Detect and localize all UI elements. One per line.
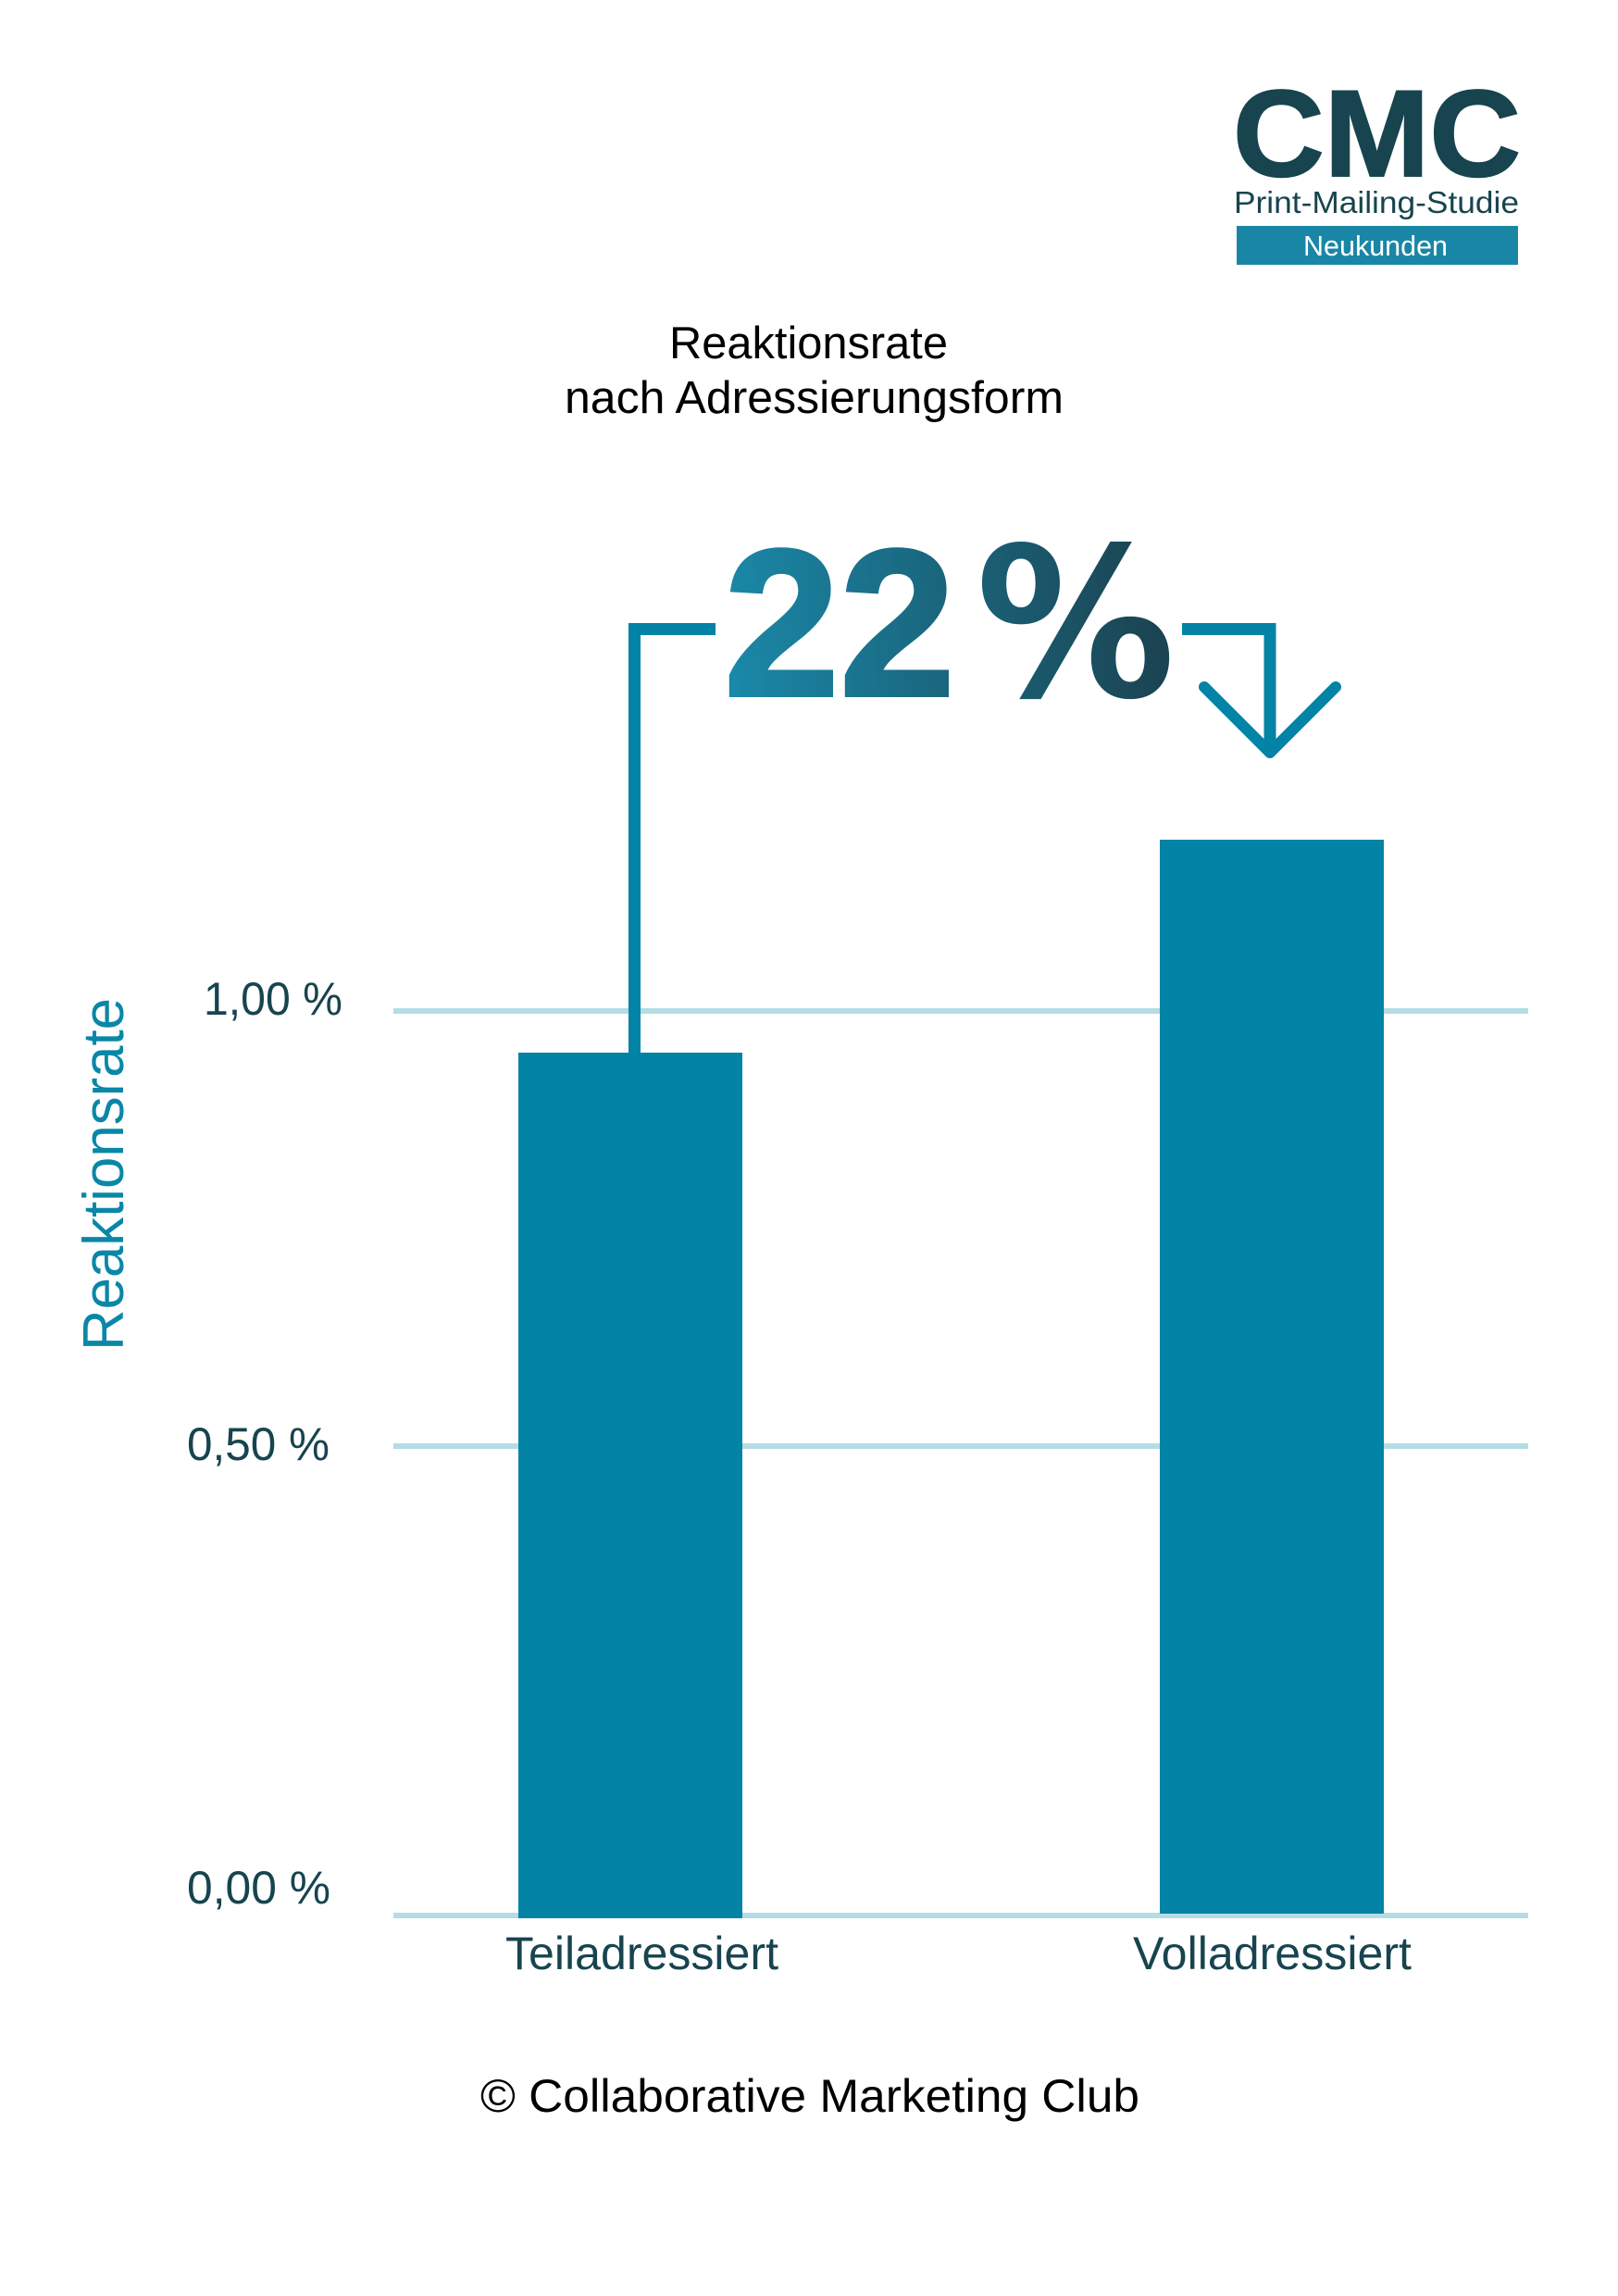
bracket from left bar to callout [629, 623, 716, 1053]
bar: Teiladressiert [518, 1053, 742, 1918]
callout: 22 % difference: 22 [724, 505, 955, 740]
title [565, 318, 1064, 423]
y-axis tick labels: 0,50 % [187, 1418, 330, 1470]
grid lines [393, 1008, 1528, 1918]
callout: 22 % difference [724, 504, 1176, 746]
logo wordmark CMC: CMC [1233, 66, 1521, 203]
logo: CMC Print-Mailing-Studie Neukunden [1233, 66, 1521, 265]
x-axis labels: Teiladressiert [505, 1928, 778, 1979]
logo badge text: Neukunden [1303, 230, 1448, 262]
title: Reaktionsrate [669, 318, 948, 368]
y-axis tick labels [187, 973, 342, 1914]
copyright: © Collaborative Marketing Club [480, 2070, 1139, 2122]
y-axis title: Reaktionsrate [72, 998, 136, 1351]
logo badge [1237, 226, 1518, 265]
x-axis labels [505, 1928, 1412, 1979]
callout: 22 % difference: % [976, 504, 1176, 746]
y-axis tick labels: 0,00 % [187, 1862, 330, 1914]
logo subtitle: Print-Mailing-Studie [1234, 185, 1519, 219]
arrow into right bar [1182, 630, 1336, 753]
y-axis tick labels: 1,00 % [204, 973, 342, 1025]
x-axis labels: Volladressiert [1133, 1928, 1412, 1979]
bar: Volladressiert [1160, 840, 1384, 1914]
title: nach Adressierungsform [565, 373, 1064, 423]
